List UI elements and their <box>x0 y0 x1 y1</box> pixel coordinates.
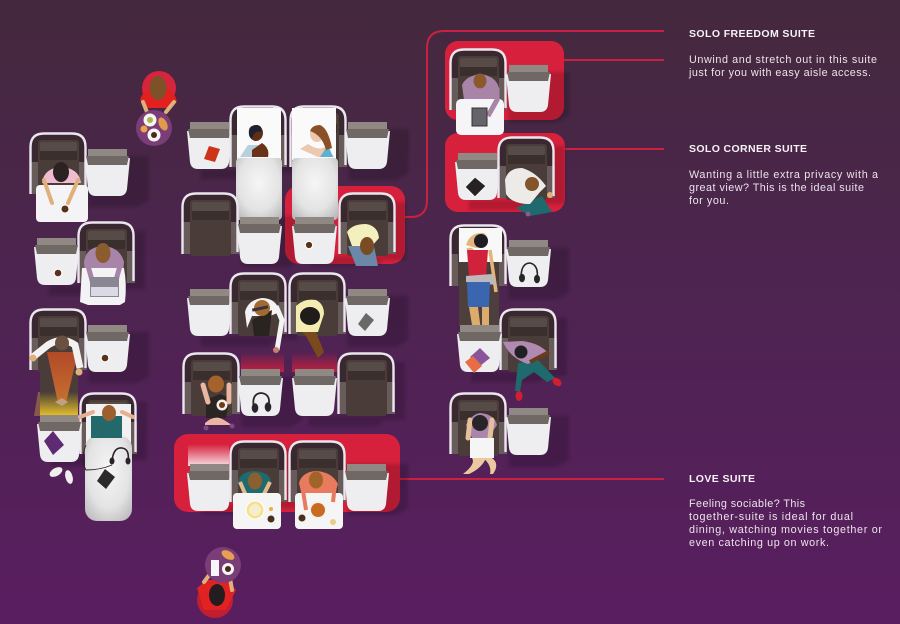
person and table: coral diner <box>295 471 343 529</box>
suite: centre row 2 left <box>182 194 282 264</box>
text block: solo corner description: for you. <box>689 195 729 207</box>
icon: books <box>465 348 490 373</box>
suite: love suite right <box>289 442 389 511</box>
text block: solo freedom description: Unwind and stretch out in this suite <box>689 54 877 66</box>
suite: centre row 2 right <box>292 194 396 264</box>
waiter: bottom with tray <box>197 547 241 618</box>
glow: aisle lights <box>34 352 337 466</box>
person: man stretching out <box>30 336 82 406</box>
panel: solo freedom highlight in centre cabin <box>285 186 405 264</box>
person: woman in yellow top <box>296 300 324 358</box>
text block: love suite description: dining, watching movies together or <box>689 524 882 536</box>
connector lines <box>400 31 664 479</box>
panel: solo corner highlight <box>445 133 565 212</box>
suite: centre row 4 right <box>292 354 395 416</box>
suite: right column middle <box>457 310 557 372</box>
suite row: left column 1 <box>30 134 130 196</box>
icon: headphones <box>253 393 270 412</box>
seat shadows <box>49 72 569 515</box>
text block: solo freedom description: just for you with easy aisle access. <box>688 67 871 79</box>
person: woman reading <box>463 413 497 474</box>
icon: dark tablet <box>465 177 486 197</box>
suite: solo corner <box>455 138 555 200</box>
panel: solo freedom highlight <box>445 41 564 120</box>
suite: centre row 4 left <box>183 354 283 416</box>
person: man in white shirt leaning <box>245 298 282 353</box>
suite row: left column 4 with bed <box>37 394 137 462</box>
text block: solo corner description: great view? This is the ideal suite <box>689 182 864 194</box>
text block: love suite description: together-suite is ideal for dual <box>689 511 853 523</box>
seat extension <box>459 280 499 326</box>
beds with sleeping couple <box>236 108 338 220</box>
icon: slippers <box>48 465 74 485</box>
suite row: left column 2 <box>34 222 135 285</box>
text block: love suite description: Feeling sociable? This <box>689 498 806 510</box>
person: man in cream shirt <box>347 224 379 266</box>
heading: love suite: LOVE SUITE <box>689 473 755 485</box>
icon: coffee cup <box>101 354 109 362</box>
suite: centre row 3 left <box>187 274 287 336</box>
person and table: solo freedom guest with tablet <box>456 74 504 135</box>
icon: tablet <box>358 313 374 331</box>
person: man with laptop <box>80 243 126 305</box>
heading: solo freedom suite: SOLO FREEDOM SUITE <box>689 28 815 40</box>
icon: red book <box>204 146 220 162</box>
person: man with teal trousers <box>503 341 563 401</box>
icon: headphones <box>520 263 539 282</box>
suite: solo freedom <box>450 50 551 112</box>
suite row: left column 3 <box>30 310 130 372</box>
icon: purple book <box>44 431 64 455</box>
suite: centre row 1 right shell and ottoman <box>290 106 390 169</box>
text block: solo corner description: Wanting a little extra privacy with a <box>689 169 878 181</box>
text block: love suite description <box>689 498 882 549</box>
icon: headphones and tablet <box>83 445 130 489</box>
text block: solo corner description <box>689 169 878 207</box>
icon: coffee cup <box>305 241 313 249</box>
bed with person in teal <box>80 404 133 521</box>
heading: solo corner suite: SOLO CORNER SUITE <box>689 143 807 155</box>
suite: right column reclining <box>450 226 551 288</box>
text block: solo freedom description <box>688 54 877 79</box>
panel: love suite highlight <box>174 434 400 512</box>
person: woman in pink at table <box>36 162 88 222</box>
suite: love suite left <box>187 442 287 511</box>
person and table: teal diner <box>233 471 281 529</box>
suite: centre row 3 right <box>289 274 390 336</box>
person: solo corner guest standing <box>505 168 553 216</box>
person: woman reclining <box>459 228 502 331</box>
icon: coffee cup <box>54 269 62 277</box>
waiter: top with tray <box>136 71 177 146</box>
person: woman holding plate <box>203 376 234 430</box>
text block: love suite description: even catching up on work. <box>689 537 829 549</box>
suite: right column lower <box>450 394 551 456</box>
suite: centre row 1 left ottoman and shell <box>187 106 287 169</box>
